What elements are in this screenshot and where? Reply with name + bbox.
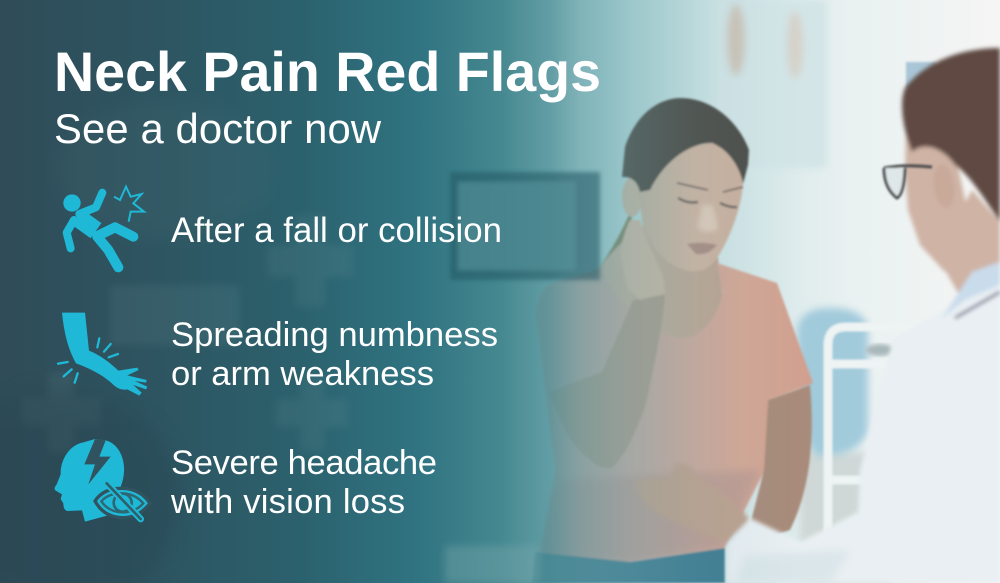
- text: vision loss: with vision loss: [170, 483, 405, 521]
- right arm: [745, 385, 812, 545]
- icon: falling person: [63, 187, 144, 267]
- doctor's neck: [945, 190, 1000, 305]
- text: after a fall: After a fall or collision: [171, 211, 502, 250]
- text: numbness: Spreading numbness: [171, 316, 498, 354]
- top-left glow: [55, 100, 275, 240]
- item 3: headache: [55, 439, 437, 522]
- faint background shapes under overlay: [0, 100, 600, 583]
- face: [638, 143, 743, 271]
- nose highlight: [697, 205, 718, 232]
- icon: head with lightning and crossed-out eye: [55, 439, 150, 522]
- ear: [622, 177, 642, 217]
- doctor's hand: [635, 462, 750, 542]
- item 2: arm: [58, 313, 498, 396]
- white coat: [727, 268, 1000, 583]
- hair: [622, 98, 749, 192]
- dark lower-left shade: [0, 390, 180, 583]
- title: Neck Pain Red Flags: [54, 41, 601, 103]
- hand on neck: [620, 220, 665, 300]
- coat collar: [942, 262, 1000, 318]
- shirt: [536, 263, 813, 562]
- floor: [800, 452, 890, 583]
- subtitle: See a doctor now: [54, 105, 382, 152]
- sleeve shade: [735, 550, 850, 583]
- blue chair: [797, 308, 868, 456]
- brows and closed eyes: [677, 183, 743, 207]
- doctor's hair: [902, 48, 1000, 222]
- jeans: [532, 548, 725, 583]
- x-ray monitor: [450, 172, 600, 280]
- stethoscope: [955, 292, 1000, 318]
- wall poster: [715, 0, 827, 168]
- cart items: [866, 344, 894, 356]
- ponytail: [599, 212, 636, 268]
- icon: numb arm: [58, 313, 147, 396]
- wall picture: [906, 62, 936, 88]
- item 1: fall: [63, 187, 502, 267]
- ear: [931, 163, 957, 209]
- glasses: [884, 166, 932, 198]
- doctor's face: [905, 125, 975, 272]
- shirt lower shade: [540, 470, 760, 562]
- faint crosses: [22, 215, 353, 452]
- text: weakness: or arm weakness: [171, 355, 434, 393]
- bench bottom: [445, 546, 540, 583]
- medical cart: [828, 327, 918, 552]
- supporting arm: [548, 295, 665, 468]
- neck and chest: [596, 225, 730, 350]
- lips: [687, 243, 717, 254]
- text: severe headache: Severe headache: [171, 444, 437, 482]
- patient: [532, 98, 813, 583]
- doctor: [635, 48, 1000, 583]
